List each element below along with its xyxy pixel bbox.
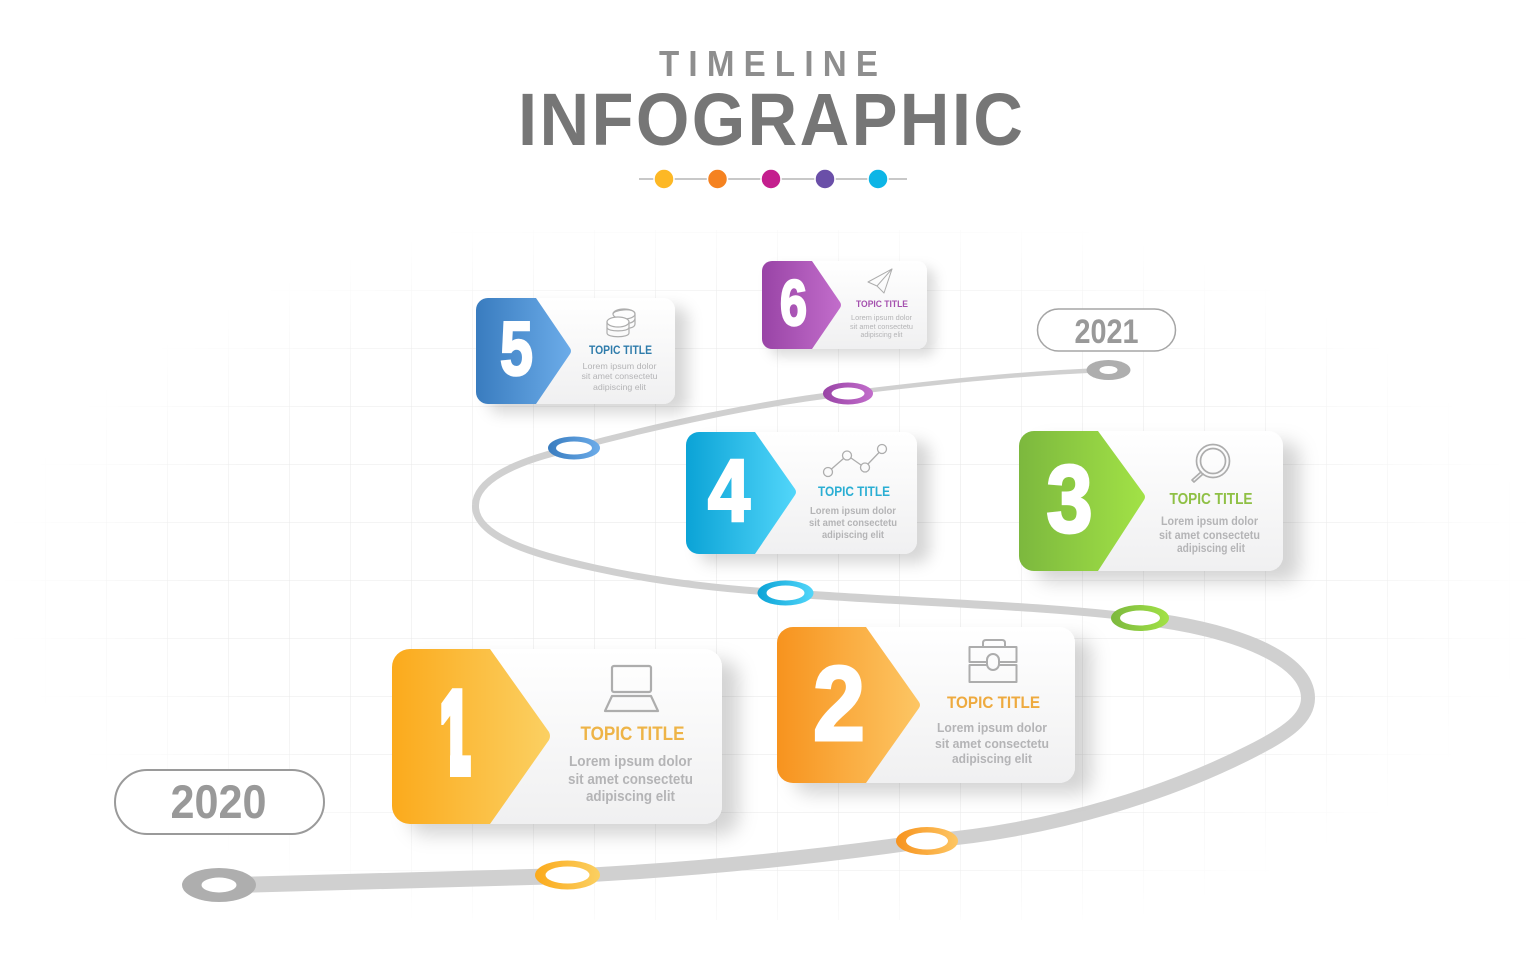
year label 2020: 2020: [170, 775, 266, 828]
icon: toolbox: [970, 640, 1016, 682]
badge: number 4: [686, 432, 796, 554]
icon: paper plane: [868, 269, 892, 293]
body text 4: [809, 506, 897, 541]
topic title 3: TOPIC TITLE: [1170, 491, 1252, 508]
node 3: [1111, 605, 1169, 631]
body text 1: Lorem ipsum dolor: [569, 754, 692, 770]
start marker: [182, 868, 256, 902]
badge: number 6: [762, 261, 841, 349]
body text 5: Lorem ipsum dolor: [582, 361, 657, 371]
body text 1: sit amet consectetu: [568, 772, 693, 788]
title: [518, 45, 1023, 162]
body text 6: adipiscing elit: [860, 332, 903, 339]
number 2: 2: [813, 645, 865, 763]
panel: step 3: [1019, 431, 1283, 571]
badge: number 5: [476, 298, 571, 404]
body text 3: Lorem ipsum dolor: [1161, 516, 1258, 528]
body text 1: adipiscing elit: [586, 789, 675, 805]
body text 5: [582, 361, 658, 392]
year label 2021: [1038, 309, 1176, 351]
panel: step 2: [777, 627, 1075, 783]
panel: step 1: [392, 649, 722, 824]
body text 3: [1159, 516, 1260, 555]
number 6: 6: [780, 267, 807, 339]
number 4: 4: [708, 441, 750, 540]
icon: laptop: [605, 666, 658, 711]
number 5: 5: [500, 307, 533, 392]
badge: number 3: [1019, 431, 1145, 571]
heading: timeline: TIMELINE: [659, 45, 878, 84]
icon: line chart: [824, 444, 886, 476]
topic title 4: TOPIC TITLE: [818, 484, 890, 499]
badge: number 1: [392, 649, 550, 824]
topic title 6: TOPIC TITLE: [856, 299, 908, 310]
body text 4: sit amet consectetu: [809, 518, 897, 529]
body text 6: Lorem ipsum dolor: [851, 315, 913, 322]
heading: infographic: INFOGRAPHIC: [518, 79, 1023, 162]
node 4: [758, 580, 814, 606]
body text 4: adipiscing elit: [822, 530, 885, 541]
panel: step 1: 1: [440, 670, 470, 797]
year label 2021: 2021: [1074, 313, 1138, 351]
body text 6: sit amet consectetu: [850, 324, 913, 331]
body text 3: sit amet consectetu: [1159, 530, 1260, 542]
timeline road: [219, 370, 1308, 886]
icon: magnifier: [1192, 444, 1230, 482]
panel: step 4: [686, 432, 917, 554]
topic title 2: TOPIC TITLE: [947, 693, 1040, 712]
panel: step 6: [762, 261, 927, 349]
colored dots divider: [639, 169, 907, 189]
topic title 1: TOPIC TITLE: [580, 724, 684, 745]
node 5: [548, 436, 600, 460]
year label 2020: [115, 770, 324, 834]
body text 2: adipiscing elit: [952, 751, 1033, 766]
node 6: [823, 382, 873, 404]
body text 3: adipiscing elit: [1177, 543, 1245, 555]
node 1: [535, 860, 600, 890]
number 3: 3: [1046, 446, 1092, 553]
body text 5: sit amet consectetu: [582, 371, 658, 381]
body text 2: Lorem ipsum dolor: [937, 720, 1047, 735]
node 2: [896, 827, 958, 855]
body text 5: adipiscing elit: [593, 382, 647, 392]
body text 2: [935, 720, 1049, 766]
icon: coins: [607, 309, 635, 337]
topic title 5: TOPIC TITLE: [589, 345, 652, 357]
badge: number 2: [777, 627, 920, 783]
end marker: [1086, 360, 1130, 380]
panel: step 5: [476, 298, 675, 404]
body text 6: [850, 315, 913, 339]
body text 1: [568, 754, 693, 805]
body text 2: sit amet consectetu: [935, 736, 1049, 751]
body text 4: Lorem ipsum dolor: [810, 506, 896, 517]
